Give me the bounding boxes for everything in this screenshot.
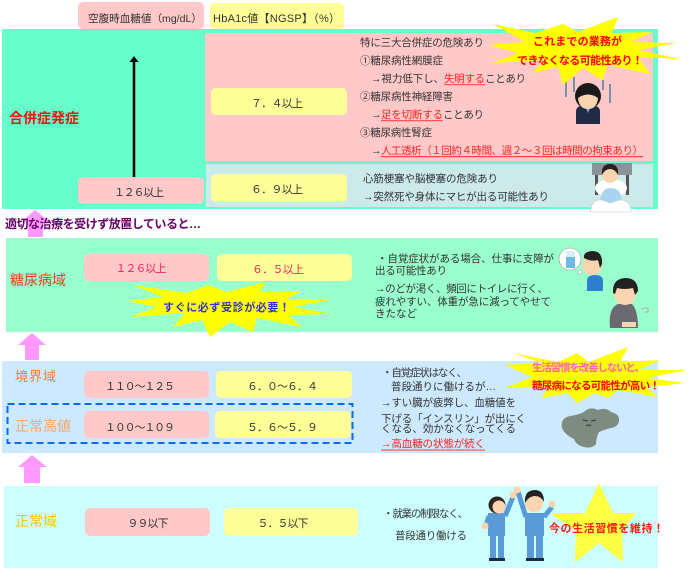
text: three major complications: ①糖尿病性網膜症 <box>360 54 444 67</box>
icon: cheering workers <box>482 486 556 561</box>
panel: complications <box>2 29 658 212</box>
heading: borderline zone: 境界域 <box>15 369 56 384</box>
callout: may not continue duties <box>488 17 680 85</box>
woman worker <box>482 492 516 561</box>
text: three major complications: → <box>371 109 382 121</box>
text: infarction risk: 心筋梗塞や脳梗塞の危険あり <box>363 172 498 185</box>
text: three major complications <box>360 36 643 157</box>
callout: see a doctor immediately <box>127 282 332 337</box>
panel: heart and brain infarction <box>206 163 653 212</box>
text: no work restrictions: 普段通り働ける <box>395 529 467 542</box>
header: fasting blood glucose: 空腹時血糖値（mg/dL） <box>88 12 202 25</box>
text: three major complications: ことあり <box>485 73 526 85</box>
text: borderline symptoms: 普段通りに働けるが… <box>391 380 496 393</box>
value: glucose 110-125 <box>84 371 209 398</box>
value: glucose 126 or above: １２６以上 <box>114 186 164 199</box>
panel: major complications <box>205 33 653 161</box>
text: borderline symptoms: くなる、効かなくなってくる <box>381 423 516 435</box>
icon: tired man <box>610 278 648 328</box>
text: infarction risk: →突然死や身体にマヒが出る可能性あり <box>363 190 549 203</box>
text: diabetes symptoms: きたなど <box>375 308 418 320</box>
callout: keep current lifestyle <box>549 483 664 562</box>
text: three major complications: 足を切断する <box>381 109 443 121</box>
text: diabetes symptoms <box>375 252 554 320</box>
value: HbA1c 7.4 or above: ７．４以上 <box>251 97 303 110</box>
text: borderline symptoms: ・自覚症状はなく、 <box>382 366 467 379</box>
text: infarction risk <box>363 172 549 203</box>
heading: diabetes zone: 糖尿病域 <box>10 272 66 288</box>
header: fasting blood glucose <box>78 2 204 29</box>
callout: may not continue duties: できなくなる可能性あり！ <box>517 53 643 67</box>
panel: normal zone <box>4 486 658 568</box>
value: HbA1c 5.6-5.9: ５．６～５．９ <box>247 422 318 434</box>
arrow: to diabetes zone <box>18 333 46 360</box>
value: HbA1c 5.6-5.9 <box>215 411 351 438</box>
header: HbA1c: HbA1c値【NGSP】（%） <box>213 12 340 25</box>
text: three major complications: 人工透析（１回約４時間、週２～３回は時間の拘束あり） <box>381 144 643 157</box>
value: HbA1c 6.0-6.4 <box>216 371 352 398</box>
man worker <box>514 486 556 561</box>
icon: tired pancreas <box>562 408 619 448</box>
text: borderline symptoms: →すい臓が疲弊し、血糖値を <box>381 396 516 409</box>
callout: lifestyle warning: 生活習慣を改善しないと、 <box>532 361 645 374</box>
value: HbA1c 6.9 or above: ６．９以上 <box>251 183 303 196</box>
text: no work restrictions: ・就業の制限なく、 <box>383 507 468 520</box>
arrow: rising glucose <box>130 56 138 177</box>
value: HbA1c 5.5 or below: ５．５以下 <box>258 518 308 530</box>
value: glucose 126 or above <box>84 254 209 281</box>
text: three major complications: ②糖尿病性神経障害 <box>360 90 453 103</box>
icon: dejected man <box>566 77 610 124</box>
callout: lifestyle warning: 糖尿病になる可能性が高い！ <box>532 379 660 392</box>
text: three major complications: 特に三大合併症の危険あり <box>360 36 484 49</box>
text: if left untreated: 適切な治療を受けず放置していると… <box>5 216 201 231</box>
value: HbA1c 7.4 or above <box>211 88 347 115</box>
header: HbA1c <box>210 3 344 30</box>
text: three major complications: → <box>371 145 382 157</box>
text: diabetes symptoms: ・自覚症状がある場合、仕事に支障が <box>377 252 554 265</box>
panel: diabetes zone <box>6 238 658 332</box>
value: HbA1c 5.5 or below <box>224 508 358 536</box>
value: glucose 110-125: １１０～１２５ <box>105 381 175 393</box>
text: borderline symptoms: →高血糖の状態が続く <box>381 437 485 450</box>
text: diabetes symptoms: 出る可能性あり <box>375 264 447 277</box>
icon: thirsty boy with glass of water <box>559 248 603 291</box>
text: no work restrictions <box>383 507 468 542</box>
arrow: to complications <box>21 210 50 237</box>
callout: keep current lifestyle: 今の生活習慣を維持！ <box>549 521 664 535</box>
callout: lifestyle warning <box>505 347 685 403</box>
text: diabetes symptoms: 疲れやすい、体重が急に減ってやせて <box>375 295 551 308</box>
value: HbA1c 6.5 or above <box>217 254 352 281</box>
heading: complications: 合併症発症 <box>9 110 79 126</box>
panel: borderline and high-normal zone <box>2 361 658 453</box>
high-normal dashed box <box>8 404 352 443</box>
value: HbA1c 6.0-6.4: ６．０～６．４ <box>247 381 318 393</box>
value: glucose 99 or below: ９９以下 <box>128 518 168 530</box>
value: HbA1c 6.9 or above <box>211 174 347 202</box>
value: glucose 126 or above: １２６以上 <box>116 262 166 275</box>
value: glucose 100-109: １００～１０９ <box>105 422 175 434</box>
text: three major complications: →視力低下し、 <box>371 72 444 85</box>
callout: may not continue duties: これまでの業務が <box>533 34 622 48</box>
text: three major complications: 失明する <box>444 72 485 85</box>
text: borderline symptoms: 下げる「インスリン」が出にく <box>381 412 526 425</box>
text: three major complications: ③糖尿病性腎症 <box>360 126 432 139</box>
callout: see a doctor immediately: すぐに必ず受診が必要！ <box>163 300 290 314</box>
text: borderline symptoms <box>381 366 526 451</box>
icon: hospital patient in bed <box>590 163 632 212</box>
heading: high-normal: 正常高値 <box>15 418 71 434</box>
value: HbA1c 6.5 or above: ６．５以上 <box>252 263 304 276</box>
text: three major complications: ことあり <box>443 109 484 121</box>
text: diabetes symptoms: →のどが渇く、頻回にトイレに行く、 <box>375 282 548 295</box>
heading: normal zone: 正常域 <box>15 513 57 529</box>
value: glucose 100-109 <box>84 411 209 438</box>
value: glucose 126 or above <box>78 177 204 204</box>
value: glucose 99 or below <box>85 508 210 536</box>
arrow: to borderline zone <box>18 455 47 483</box>
